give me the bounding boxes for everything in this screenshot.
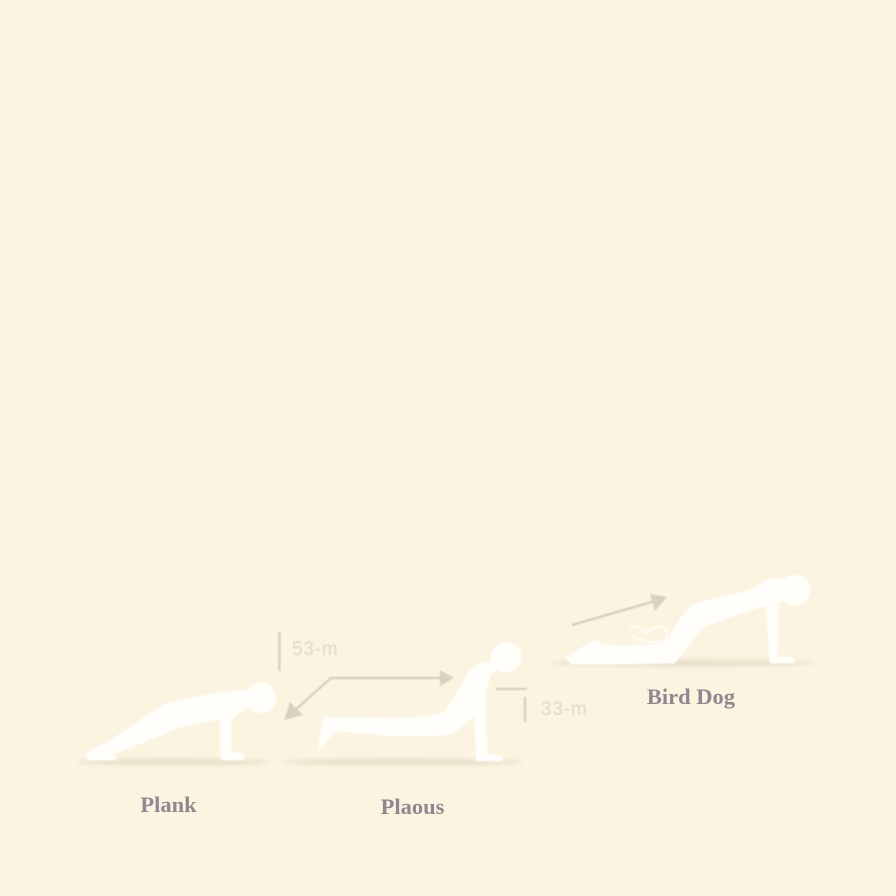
panel: plaous (283, 643, 523, 819)
arrow: two-headed bent arrow (284, 670, 454, 720)
plaous figure (319, 643, 520, 760)
plank label: Plank (140, 792, 197, 817)
bird dog figure (567, 576, 809, 663)
dimension: 53-m (280, 632, 338, 671)
panel: bird dog (550, 576, 814, 709)
plaous ground shadow (283, 758, 523, 766)
dimension: 33-m (496, 689, 588, 722)
bird dog label: Bird Dog (647, 684, 736, 709)
panel: plank (77, 684, 275, 817)
plaous label: Plaous (381, 794, 445, 819)
bird dog scribble mark (630, 626, 668, 642)
bird dog ground shadow (550, 660, 814, 666)
plank figure (88, 684, 275, 759)
arrow: diagonal up right (572, 594, 667, 625)
dimension: 53-m: 53-m (292, 639, 338, 660)
dimension: 33-m: 33-m (541, 699, 588, 720)
plank ground shadow (77, 758, 269, 766)
